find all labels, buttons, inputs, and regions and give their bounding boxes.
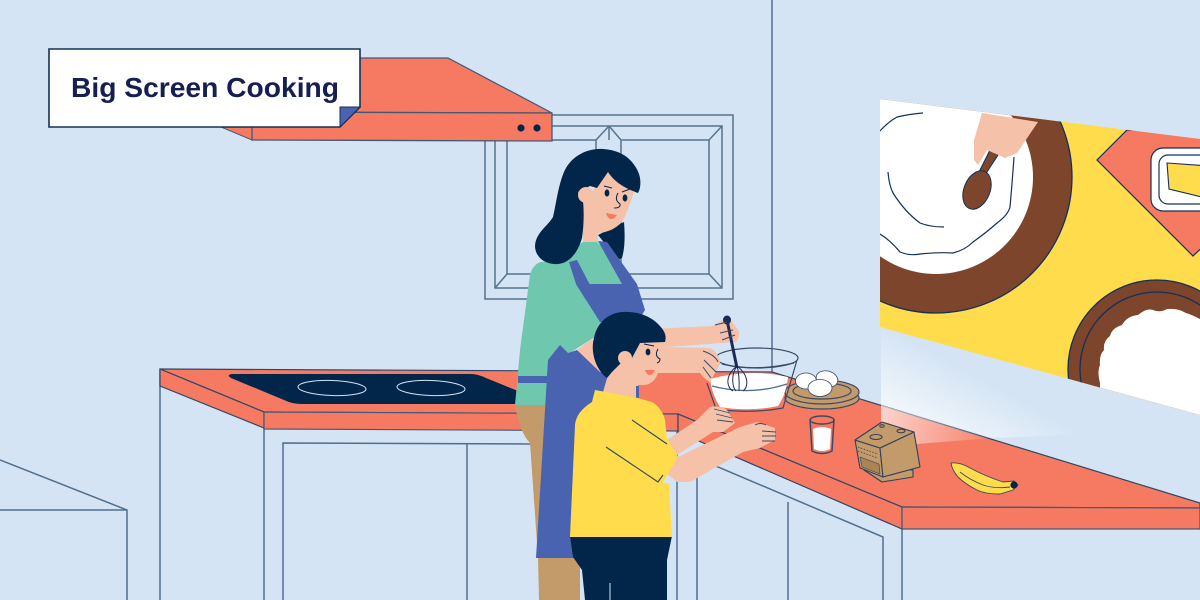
boy sleeve lines bbox=[606, 420, 667, 482]
hand bbox=[974, 113, 1038, 165]
projector speaker grille bbox=[860, 457, 880, 474]
small bowl top view bbox=[1067, 279, 1200, 415]
counter top bbox=[160, 369, 1200, 529]
projector light on counter bbox=[881, 405, 993, 444]
glass of milk bbox=[810, 416, 834, 454]
boy shirt bbox=[570, 390, 678, 537]
woman shirt bbox=[515, 242, 634, 405]
boy neck and face bbox=[603, 340, 660, 398]
boy bbox=[570, 312, 776, 600]
title card bbox=[49, 49, 360, 127]
mixing bowl bbox=[707, 348, 798, 411]
woman hair bbox=[535, 149, 640, 264]
woman fingers bbox=[703, 322, 735, 378]
left counter side cabinet lines bbox=[160, 369, 902, 600]
boy facial features bbox=[644, 344, 660, 375]
boy near arm bbox=[665, 422, 775, 482]
side cabinet outline bbox=[0, 460, 127, 600]
woman bbox=[515, 149, 739, 600]
cooktop bbox=[229, 374, 518, 404]
title text: Big Screen Cooking bbox=[71, 72, 339, 103]
apron edge at collar bbox=[636, 386, 639, 398]
projector bbox=[855, 422, 920, 482]
boy finger lines bbox=[714, 409, 776, 441]
spoon bbox=[962, 150, 998, 210]
projected screen on wall bbox=[880, 99, 1200, 415]
eggs bbox=[796, 368, 840, 396]
wall corner line bbox=[771, 0, 773, 375]
apron bbox=[518, 241, 645, 558]
large bowl top view bbox=[880, 99, 1073, 314]
banana bbox=[951, 463, 1018, 494]
window frame bbox=[485, 115, 733, 299]
eggs on wooden board bbox=[785, 368, 859, 409]
woman back hair bbox=[598, 222, 625, 260]
boy pants bbox=[570, 536, 672, 600]
range hood bbox=[221, 58, 552, 141]
orange placemat with dish bbox=[1097, 130, 1200, 256]
woman legs bbox=[515, 405, 580, 600]
woman facial features bbox=[604, 186, 630, 219]
woman neck and face bbox=[583, 170, 634, 242]
glass bowl outline bbox=[707, 348, 798, 411]
whisk bbox=[724, 316, 747, 391]
woman arm near bbox=[577, 340, 720, 382]
boy hair bbox=[593, 312, 666, 378]
boy ear bbox=[618, 351, 632, 365]
boy far arm bbox=[667, 406, 735, 455]
batter bowl bbox=[710, 373, 788, 409]
projector light beam on wall bbox=[881, 327, 1200, 438]
woman arm far bbox=[650, 319, 739, 348]
woman ear bbox=[578, 187, 594, 203]
